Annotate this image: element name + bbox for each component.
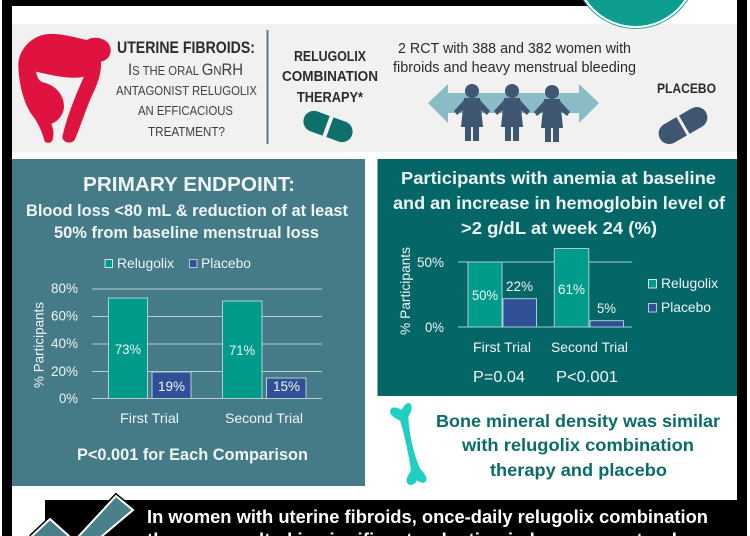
text: p value: P<0.001 for Each Comparison	[77, 445, 308, 464]
bar chart: hemoglobin: 61%	[558, 281, 585, 297]
text: hemoglobin p values: P<0.001	[556, 369, 618, 386]
text: endpoint definition	[26, 201, 348, 242]
text: hemoglobin p values: P=0.04	[473, 369, 525, 386]
text: bone density finding: Bone mineral density was similar	[436, 411, 720, 431]
panel: bone mineral density	[390, 403, 720, 485]
panel: primary endpoint	[12, 159, 365, 486]
label: relugolix combination therapy: THERAPY*	[297, 90, 363, 106]
heading: uterine fibroids question: TREATMENT?	[148, 124, 225, 139]
heading: uterine fibroids question: IS THE ORAL GNRH	[128, 61, 243, 79]
bar chart: primary endpoint: 60%	[51, 308, 78, 324]
bar chart: primary endpoint: 19%	[158, 378, 185, 394]
text: endpoint definition: 50% from baseline menstrual loss	[54, 223, 319, 242]
text: hemoglobin p values	[473, 369, 618, 386]
heading: uterine fibroids question: AN EFFICACIOUS	[138, 103, 233, 118]
icon: women	[454, 84, 570, 142]
bar chart: primary endpoint: Second Trial	[225, 410, 303, 426]
heading: uterine fibroids question: ANTAGONIST RELUGOLIX	[116, 83, 257, 98]
bar chart: hemoglobin: 0%	[425, 319, 444, 335]
icon: randomization arrow	[428, 84, 599, 123]
bar chart: primary endpoint: % Participants	[30, 302, 46, 388]
legend: hemoglobin: Relugolix	[661, 275, 718, 291]
icon: teal pill	[300, 108, 356, 145]
bar chart: hemoglobin: Second Trial	[551, 339, 628, 355]
icon: check mark	[32, 496, 133, 536]
heading: anemia: and an increase in hemoglobin level of	[393, 193, 725, 213]
bar chart: hemoglobin: 5%	[597, 300, 616, 316]
bar chart: primary endpoint: 80%	[51, 280, 78, 296]
heading: uterine fibroids question	[116, 39, 257, 139]
panel: header	[12, 24, 737, 152]
heading: uterine fibroids question: UTERINE FIBROIDS:	[117, 39, 255, 57]
text: endpoint definition: Blood loss <80 mL & reduction of at least	[26, 201, 348, 220]
text: conclusion	[147, 507, 708, 536]
legend: hemoglobin	[648, 275, 718, 315]
bar chart: primary endpoint	[30, 280, 322, 426]
legend: primary endpoint: Relugolix	[117, 255, 174, 271]
heading: anemia	[393, 168, 725, 238]
text: bone density finding: with relugolix combination	[461, 435, 694, 455]
panel: conclusion	[32, 496, 737, 536]
text: trial description: fibroids and heavy menstrual bleeding	[393, 59, 636, 76]
bar chart: primary endpoint: 40%	[51, 335, 78, 351]
heading: anemia: Participants with anemia at baseline	[401, 168, 716, 188]
bar chart: hemoglobin: 50%	[472, 287, 498, 303]
bar chart: primary endpoint: 15%	[273, 378, 300, 394]
bar chart: primary endpoint: First Trial	[120, 410, 179, 426]
heading: anemia: >2 g/dL at week 24 (%)	[461, 218, 657, 238]
icon: journal badge circle	[574, 0, 698, 29]
bar chart: primary endpoint: 0%	[59, 390, 78, 406]
text: conclusion: In women with uterine fibroids, once-daily relugolix combination	[147, 507, 708, 527]
bar chart: primary endpoint: 73%	[115, 341, 141, 357]
icon: uterus	[18, 34, 111, 143]
icon: bone	[390, 403, 427, 485]
text: trial description: 2 RCT with 388 and 382 women with	[398, 40, 631, 57]
bar chart: primary endpoint: 71%	[229, 342, 255, 358]
label: relugolix combination therapy: RELUGOLIX	[294, 49, 366, 65]
text: trial description	[393, 40, 636, 76]
panel: anemia and hemoglobin	[378, 159, 737, 396]
heading: primary endpoint: PRIMARY ENDPOINT:	[83, 173, 295, 196]
text: bone density finding: therapy and placebo	[490, 460, 667, 480]
bar chart: primary endpoint: 20%	[51, 363, 78, 379]
icon: placebo pill	[655, 103, 711, 148]
bar chart: hemoglobin: 22%	[506, 278, 533, 294]
legend: primary endpoint: Placebo	[201, 255, 251, 271]
text: bone density finding	[436, 411, 720, 480]
label: relugolix combination therapy	[282, 49, 378, 106]
bar chart: hemoglobin	[397, 247, 632, 355]
bar chart: hemoglobin: % Participants	[397, 247, 413, 335]
label: relugolix combination therapy: COMBINATION	[282, 69, 378, 85]
legend: hemoglobin: Placebo	[661, 299, 711, 315]
bar chart: hemoglobin: First Trial	[473, 339, 531, 355]
label: placebo: PLACEBO	[657, 80, 716, 96]
bar chart: hemoglobin: 50%	[417, 254, 444, 270]
legend: primary endpoint	[105, 255, 251, 271]
